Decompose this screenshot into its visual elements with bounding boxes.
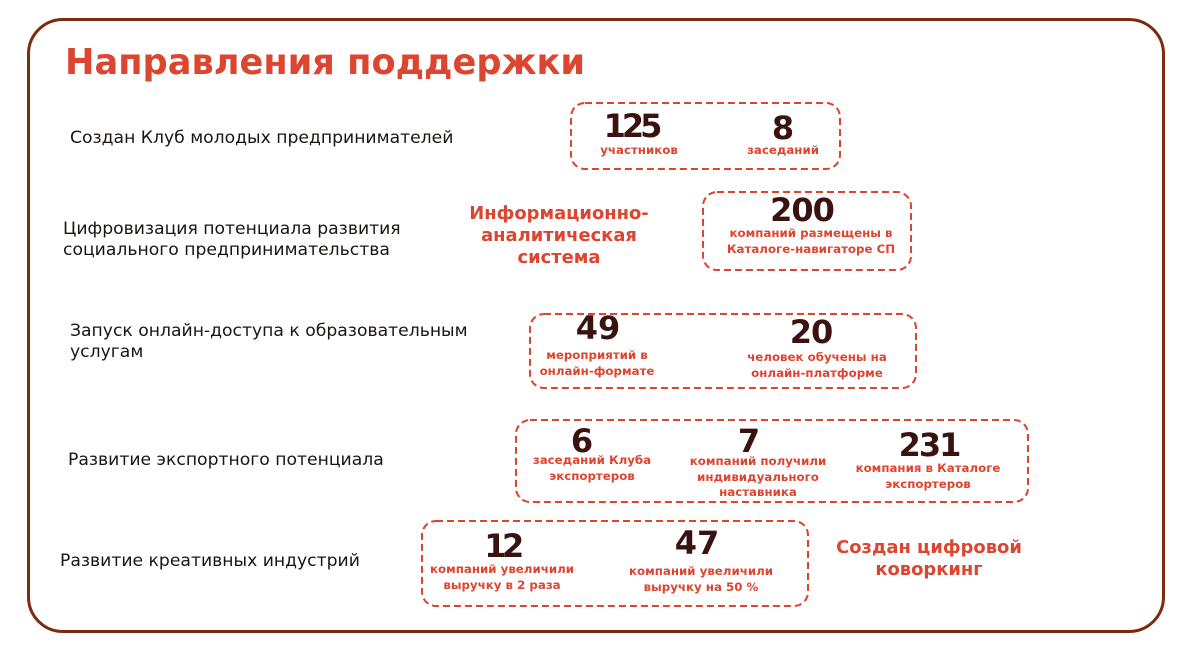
stat: 20: 20 bbox=[790, 313, 832, 351]
stat: 12: 12 bbox=[484, 527, 520, 565]
caption: trained: онлайн-платформе bbox=[751, 366, 883, 380]
highlight: information system: система bbox=[518, 247, 600, 268]
caption: catalog: компаний размещены в bbox=[729, 226, 892, 240]
highlight: digital coworking: коворкинг bbox=[875, 559, 983, 580]
caption: catalog bbox=[727, 226, 895, 256]
caption: events bbox=[540, 348, 654, 378]
row 3 label bbox=[70, 321, 468, 362]
caption: trained: человек обучены на bbox=[747, 350, 887, 364]
panel: export stats bbox=[515, 419, 1029, 503]
title: Направления поддержки bbox=[65, 42, 585, 83]
stat: 125: 125 bbox=[604, 107, 658, 145]
row 4 label: Развитие экспортного потенциала bbox=[68, 450, 384, 470]
row 2 label: Цифровизация потенциала развития bbox=[63, 219, 401, 239]
caption: revenue 50 bbox=[629, 564, 773, 594]
caption: участников: участников bbox=[600, 143, 678, 157]
stat: 47: 47 bbox=[675, 524, 719, 562]
panel: creative stats bbox=[421, 520, 809, 607]
caption: revenue x2 bbox=[430, 562, 574, 592]
stat: 49: 49 bbox=[576, 309, 620, 347]
highlight: information system bbox=[469, 203, 649, 268]
caption: заседаний: заседаний bbox=[747, 143, 819, 157]
caption: mentors: индивидуального bbox=[697, 470, 819, 484]
caption: revenue x2: компаний увеличили bbox=[430, 562, 574, 576]
row 2 label bbox=[63, 219, 401, 260]
highlight: information system: аналитическая bbox=[481, 225, 637, 246]
row 5 label: Развитие креативных индустрий bbox=[60, 551, 360, 571]
caption: mentors: компаний получили bbox=[690, 454, 826, 468]
highlight: digital coworking: Создан цифровой bbox=[836, 537, 1022, 558]
caption: mentors: наставника bbox=[719, 485, 797, 499]
caption: club meetings: экспортеров bbox=[549, 468, 635, 482]
caption: revenue 50: компаний увеличили bbox=[629, 564, 773, 578]
row 3 label: Запуск онлайн-доступа к образовательным bbox=[70, 321, 468, 341]
highlight: digital coworking bbox=[836, 537, 1022, 580]
caption: revenue 50: выручку на 50 % bbox=[644, 580, 758, 594]
highlight: information system: Информационно- bbox=[469, 203, 649, 224]
row 3 label: услугам bbox=[70, 342, 143, 362]
stat: 200: 200 bbox=[770, 191, 834, 229]
caption: trained bbox=[747, 350, 887, 380]
caption: events: мероприятий в bbox=[546, 348, 648, 362]
caption: club meetings: заседаний Клуба bbox=[533, 453, 651, 467]
row 1 label: Создан Клуб молодых предпринимателей bbox=[70, 128, 453, 148]
caption: revenue x2: выручку в 2 раза bbox=[443, 578, 561, 592]
panel: online stats bbox=[529, 313, 917, 389]
stat: 8: 8 bbox=[772, 109, 794, 147]
caption: events: онлайн-формате bbox=[540, 364, 654, 378]
caption: exporters catalog: компания в Каталоге bbox=[856, 461, 1000, 475]
caption: mentors bbox=[690, 454, 826, 499]
row 2 label: социального предпринимательства bbox=[63, 240, 390, 260]
caption: exporters catalog bbox=[856, 461, 1000, 490]
caption: exporters catalog: экспортеров bbox=[885, 476, 971, 490]
panel: club stats bbox=[570, 102, 841, 170]
caption: club meetings bbox=[533, 453, 651, 482]
caption: catalog: Каталоге-навигаторе СП bbox=[727, 242, 895, 256]
stat: 231: 231 bbox=[899, 426, 959, 464]
panel: catalog stats bbox=[702, 191, 912, 271]
stat: 6: 6 bbox=[571, 422, 593, 460]
stat: 7: 7 bbox=[738, 422, 760, 460]
